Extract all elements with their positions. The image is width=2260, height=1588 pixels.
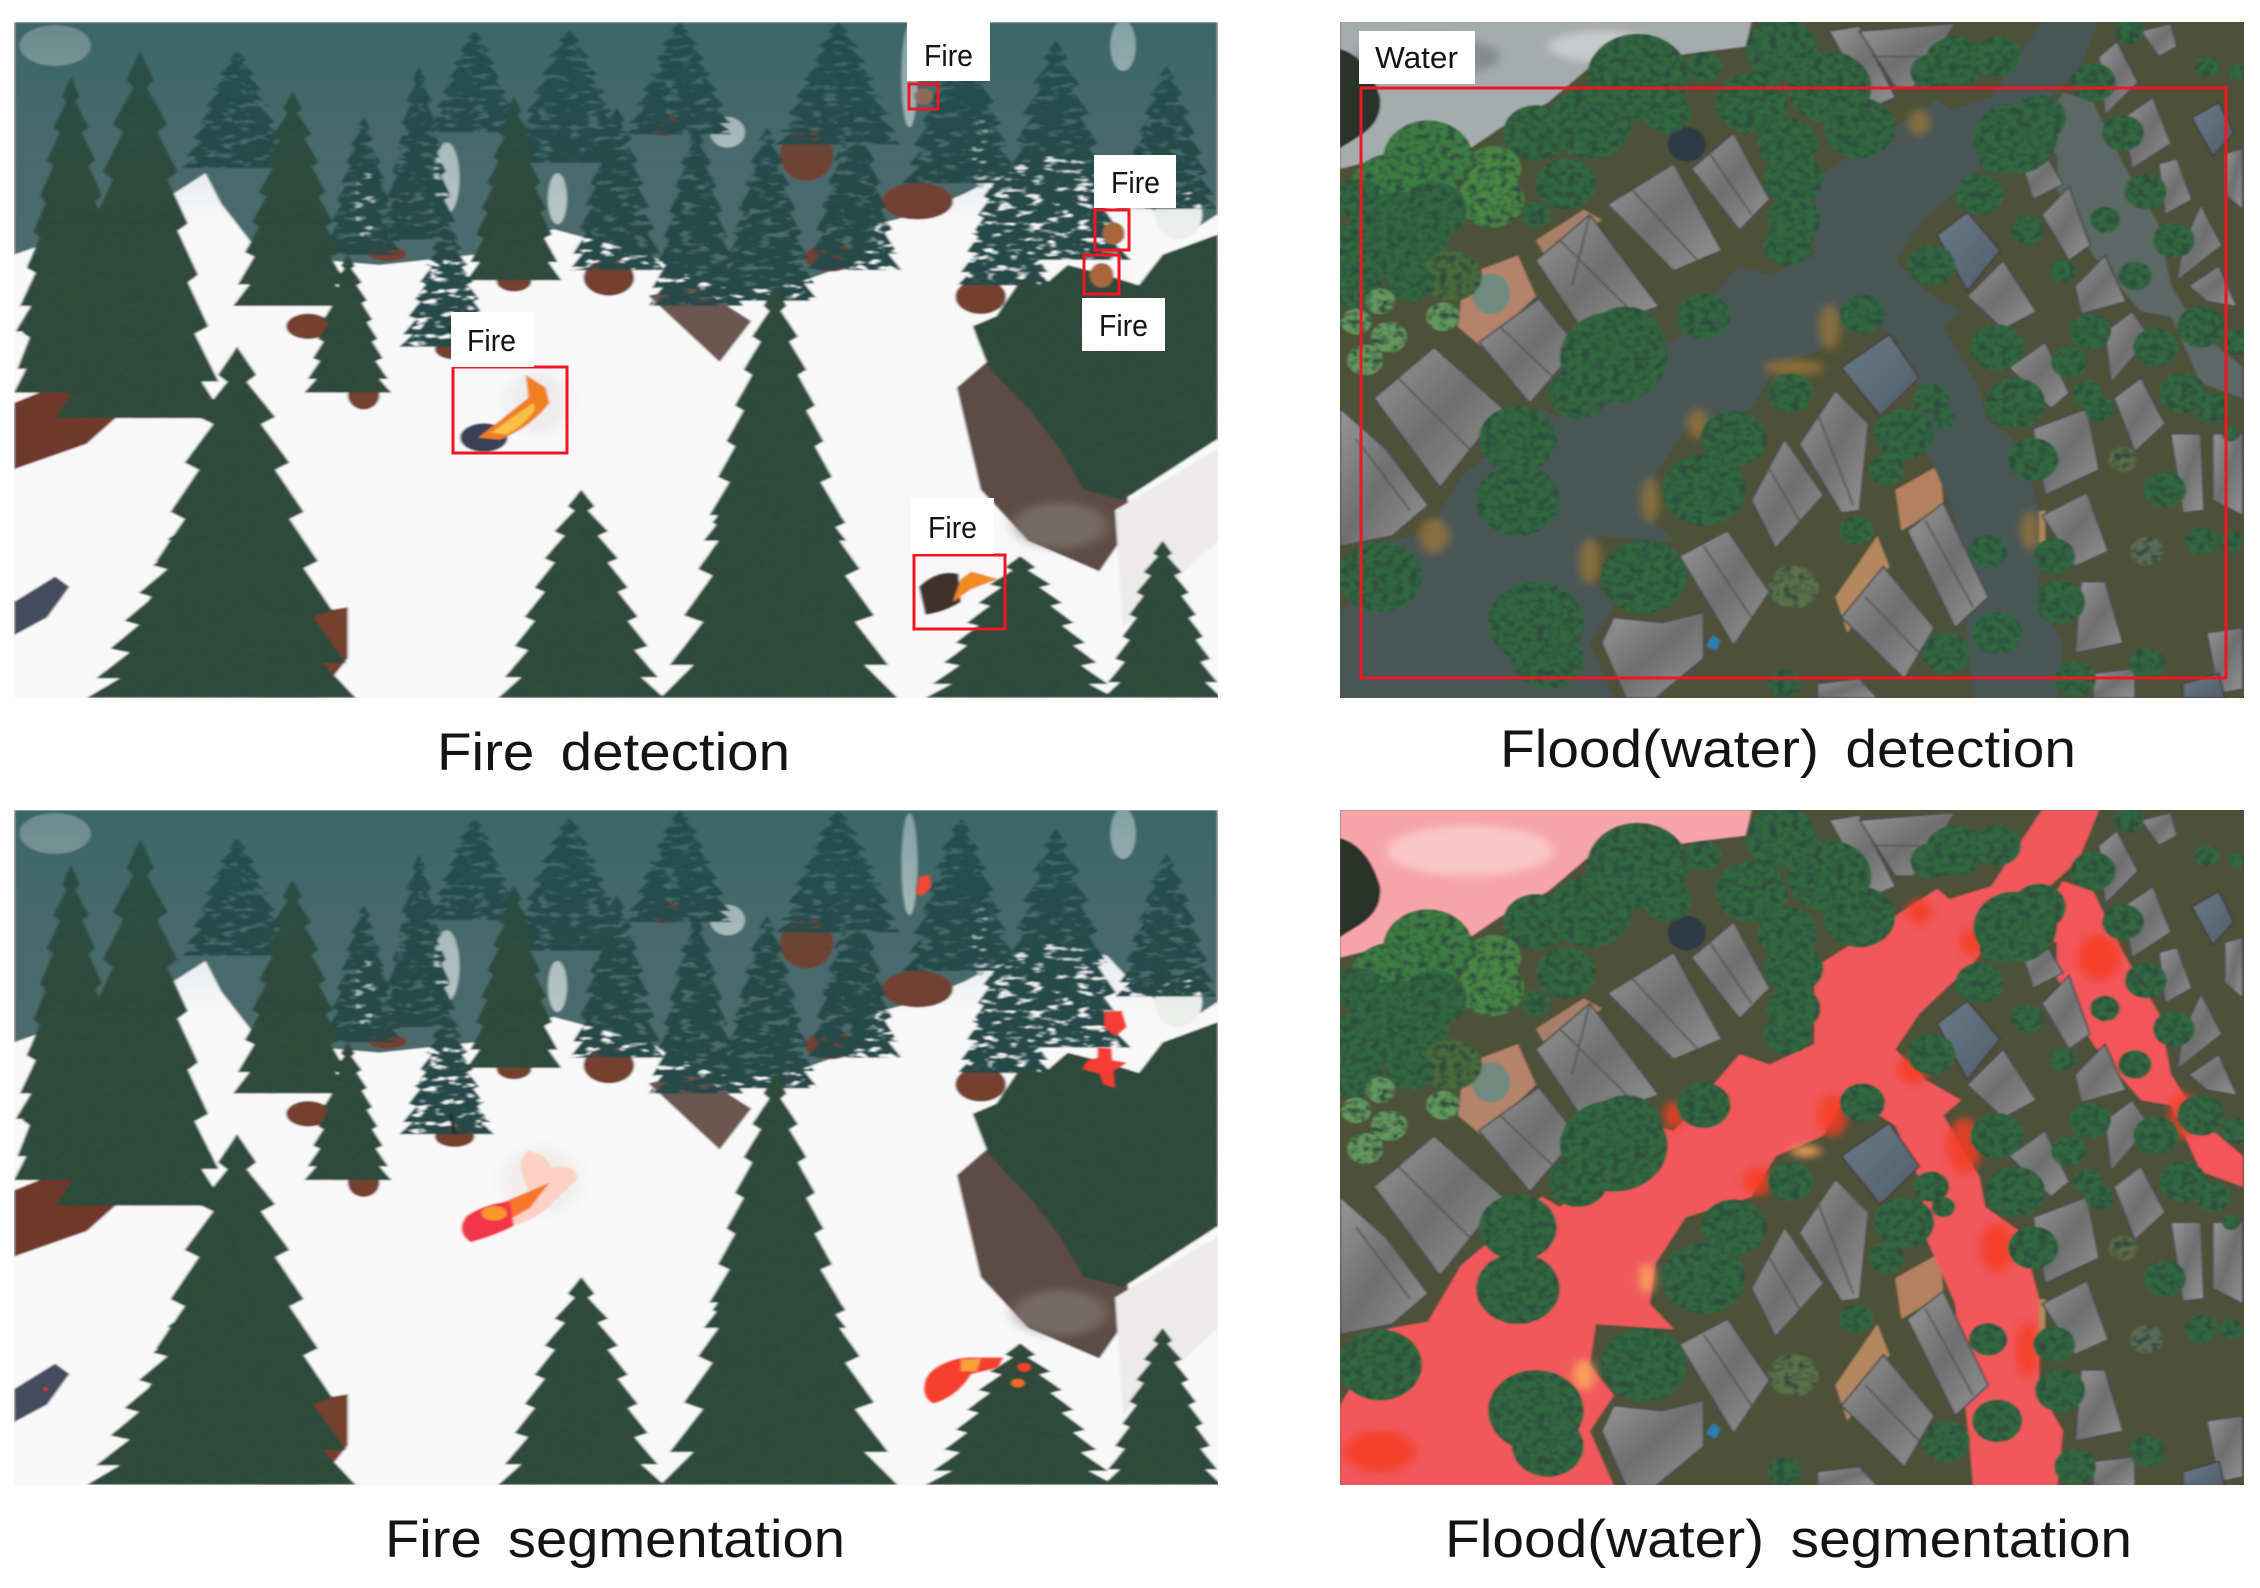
label: water (1359, 31, 1475, 84)
panel: fire detection (0, 0, 1250, 725)
photo: snowy pine forest with segmented fire masks (14, 810, 1218, 1485)
label: fire 2 (911, 498, 994, 554)
label: fire 4 (1094, 155, 1176, 208)
bounding box: fire 4 (1095, 210, 1129, 250)
caption: flood segmentation: Flood(water) segmentation (1445, 1510, 2132, 1569)
photo: flooded neighbourhood with red water mask (1340, 810, 2244, 1485)
panel: fire segmentation (0, 788, 1250, 1512)
label: fire 3: Fire (924, 38, 973, 73)
bounding box: fire 5 (1084, 255, 1119, 294)
label: water: Water (1375, 40, 1458, 75)
label: fire 1: Fire (467, 323, 516, 358)
label: fire 3 (907, 22, 990, 81)
bounding box: fire 1 (453, 367, 567, 453)
bounding box: fire 3 (909, 84, 938, 109)
label: fire 1 (451, 312, 534, 367)
label: fire 5: Fire (1099, 308, 1148, 343)
bounding box: water (1361, 88, 2226, 678)
panel: flood segmentation (1320, 790, 2260, 1512)
photo: snowy pine forest with fires (14, 22, 1218, 698)
label: fire 2: Fire (928, 510, 977, 545)
mask: side channel (2027, 881, 2243, 1187)
mask: main flooded street (1340, 810, 2099, 1486)
panel: flood detection (1320, 1, 2260, 725)
label: fire 5 (1082, 298, 1165, 351)
label: fire 4: Fire (1111, 165, 1160, 200)
photo: flooded neighbourhood (1340, 22, 2244, 698)
caption: fire detection: Fire detection (437, 723, 790, 782)
bounding box: fire 2 (914, 555, 1005, 629)
caption: fire segmentation: Fire segmentation (385, 1510, 845, 1569)
caption: flood detection: Flood(water) detection (1500, 720, 2076, 779)
mask: small fire patches (42, 874, 1128, 1404)
mask: reflected sky region (1340, 810, 1752, 958)
